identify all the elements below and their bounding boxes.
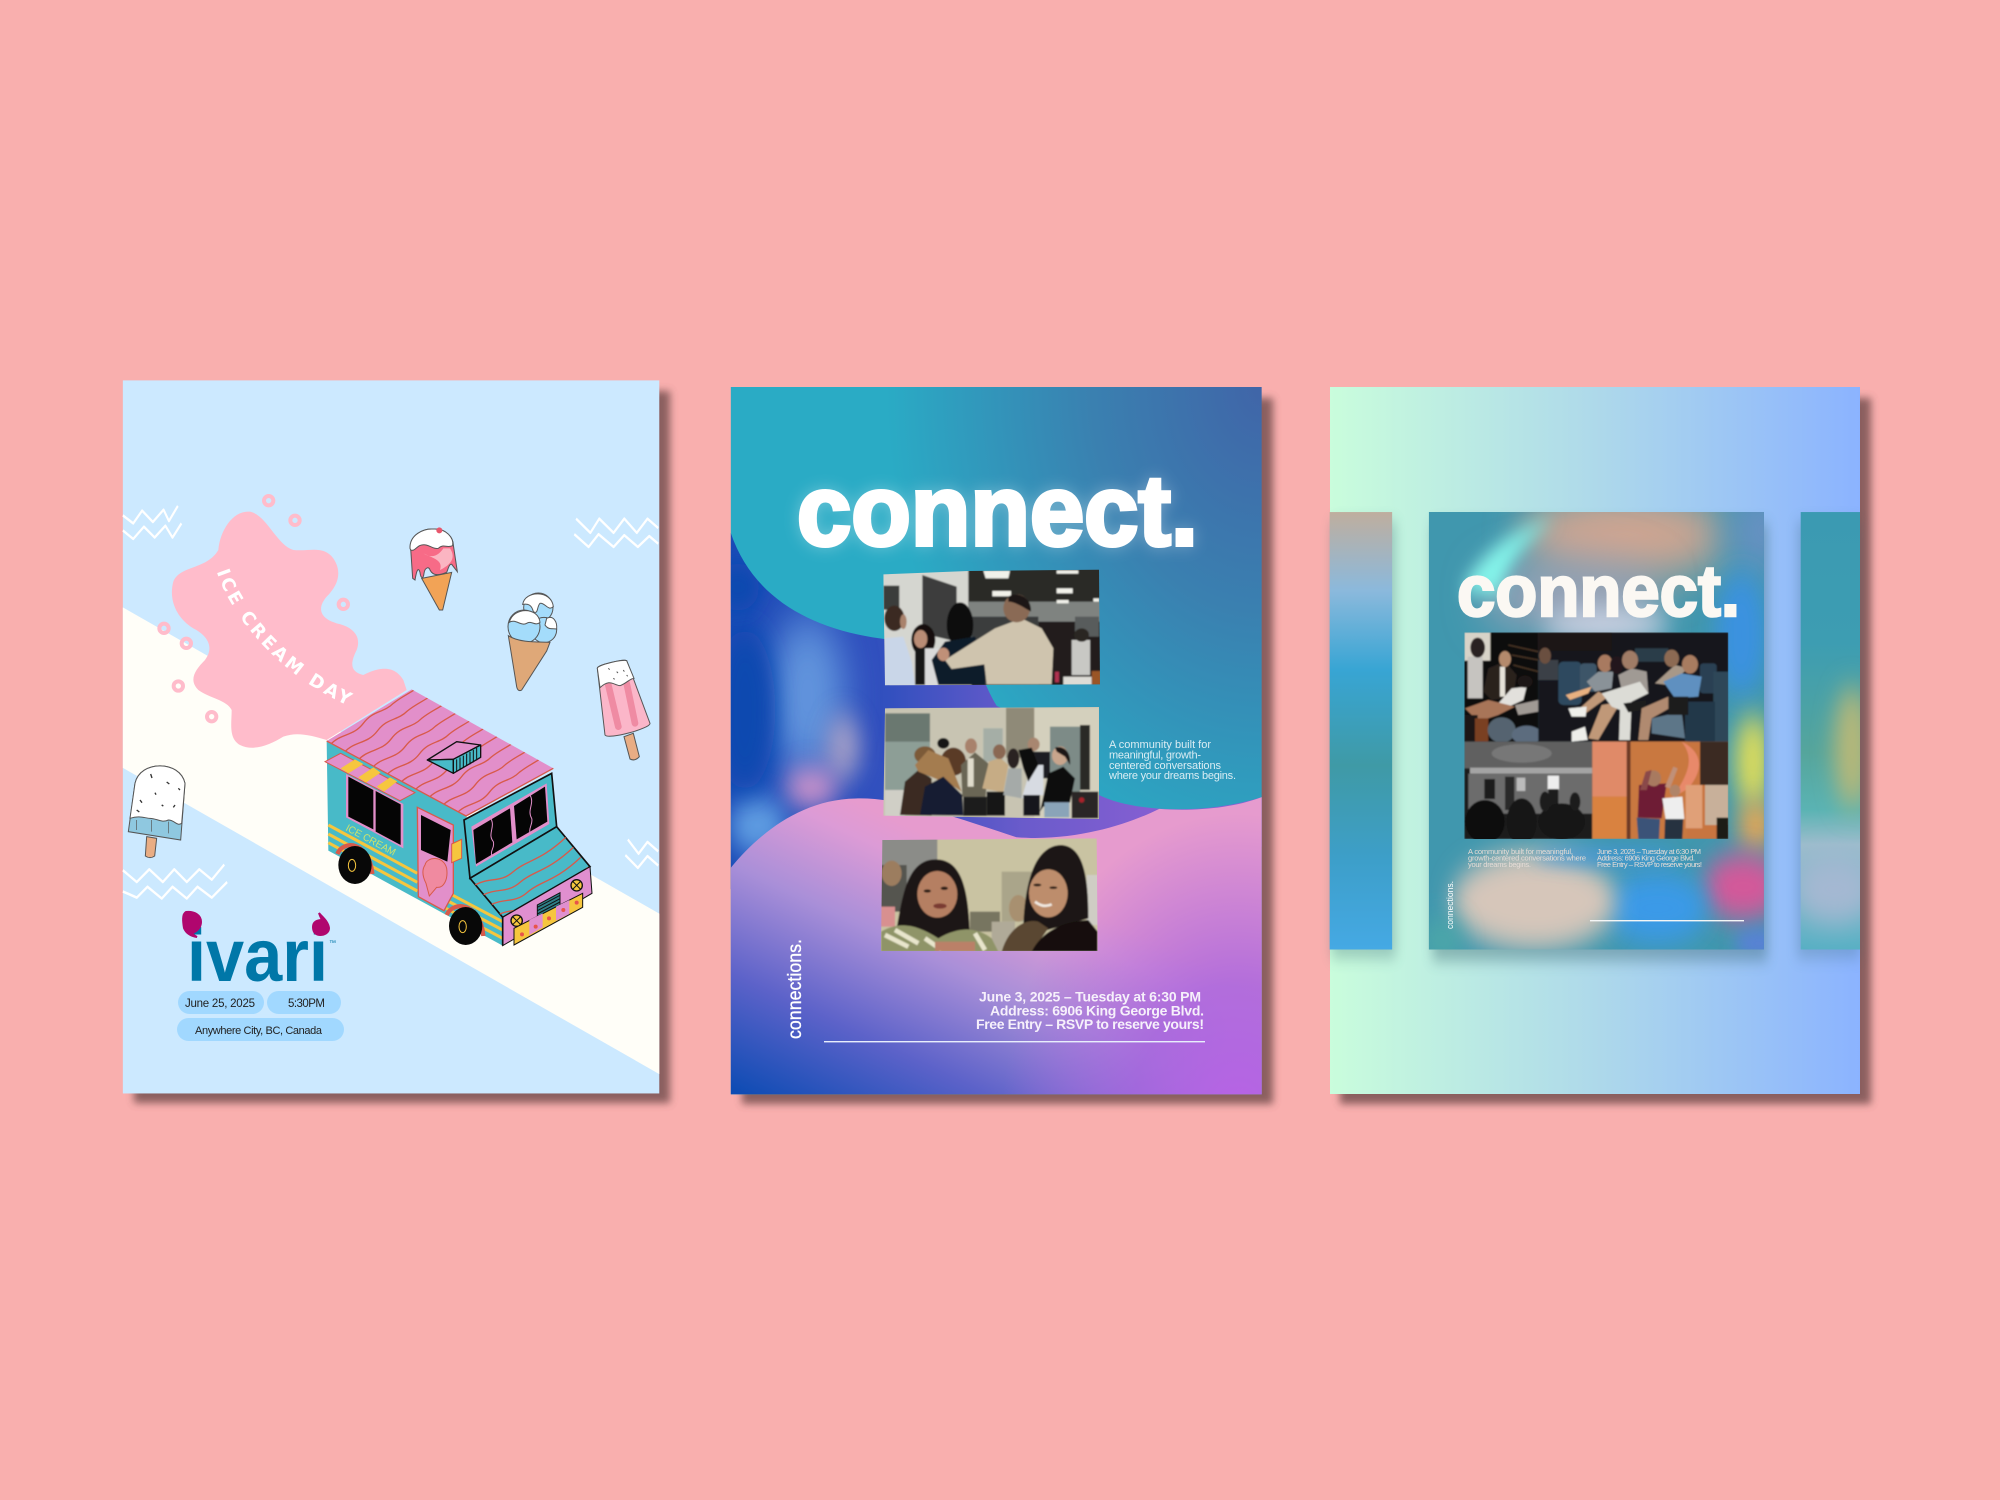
photo grid: [1464, 632, 1728, 845]
mirror: [452, 839, 462, 863]
small text columns: Free Entry – RSVP to reserve yours!: [1597, 860, 1702, 869]
door: [417, 807, 453, 911]
small text columns: growth-centered conversations where: [1468, 854, 1586, 862]
icon: blue scoops cone: [508, 593, 557, 691]
rule: [824, 1041, 1205, 1042]
small text columns: A community built for meaningful,: [1468, 847, 1573, 856]
awning: [325, 753, 415, 801]
pill: date: June 25, 2025: [185, 998, 255, 1010]
truck side label: ICE CREAM: [344, 823, 397, 858]
event details: June 3, 2025 – Tuesday at 6:30 PM: [979, 988, 1201, 1004]
vertical brand: connections.: [785, 939, 806, 1039]
photo: black and white stage: [1464, 742, 1592, 845]
logo: ivari: ivari: [187, 914, 328, 997]
pill: time: 5:30PM: [288, 998, 325, 1010]
event details: Address: 6906 King George Blvd.: [990, 1002, 1204, 1018]
title glow: connect.: [797, 455, 1198, 567]
icon: pink popsicle: [597, 660, 650, 760]
body text: centered conversations: [1109, 760, 1222, 772]
zigzag decorations: [123, 506, 658, 899]
roof vent: [427, 742, 481, 773]
small text columns: your dreams begins.: [1468, 860, 1531, 869]
photo: hands together: [1464, 632, 1542, 744]
small text columns: [1468, 847, 1702, 869]
side panel left: [1330, 512, 1396, 958]
panel: connect poster green: [1330, 387, 1874, 1104]
vertical brand small: connections.: [1445, 881, 1455, 929]
windshield: [464, 773, 557, 878]
pill: date: [178, 991, 264, 1014]
pink lower wave: [731, 797, 1262, 1094]
body text: [1108, 739, 1236, 782]
photo: theatre seats: [1538, 632, 1728, 742]
side windows: [346, 774, 403, 848]
event details: [976, 988, 1204, 1032]
hood: [470, 827, 590, 917]
photo: office group standing: [882, 705, 1102, 820]
ice cream icons: [410, 527, 650, 760]
small text columns: Address: 6906 King George Blvd.: [1597, 854, 1695, 862]
blue mid band: [715, 533, 1262, 889]
inner poster: [1426, 512, 1773, 968]
pill: time: [267, 991, 341, 1014]
logo: ivari: ™: [329, 940, 336, 947]
side panel right: [1793, 512, 1862, 964]
side stripes: [328, 825, 503, 938]
body text: meaningful, growth-: [1109, 750, 1201, 762]
pink rings: [159, 496, 348, 721]
pill: location: [177, 1018, 344, 1041]
pill: location: Anywhere City, BC, Canada: [195, 1025, 323, 1037]
wheels: [337, 845, 372, 874]
event details: Free Entry – RSVP to reserve yours!: [976, 1016, 1204, 1032]
photo: office group hug: [882, 568, 1102, 687]
inner title: connect.: [1457, 552, 1740, 632]
photo: men on orange stage: [1592, 742, 1728, 839]
panel: connect poster blue: [715, 387, 1273, 1104]
body text: A community built for: [1109, 739, 1211, 751]
icon: swirl ice cream cone: [410, 527, 457, 610]
title: connect: connect.: [797, 455, 1198, 567]
pink splash blob: [128, 496, 407, 858]
bumper: [503, 867, 592, 946]
truck: [325, 688, 592, 946]
photo: two women talking: [880, 837, 1100, 953]
roof: [327, 689, 553, 816]
body text: where your dreams begins.: [1108, 770, 1236, 782]
splash title: ICE CREAM DAY: [217, 568, 354, 704]
small text columns: June 3, 2025 – Tuesday at 6:30 PM: [1597, 847, 1701, 856]
panel: ice cream day poster: [122, 380, 676, 1108]
rule small: [1590, 920, 1744, 921]
icon: white popsicle: [128, 766, 185, 858]
